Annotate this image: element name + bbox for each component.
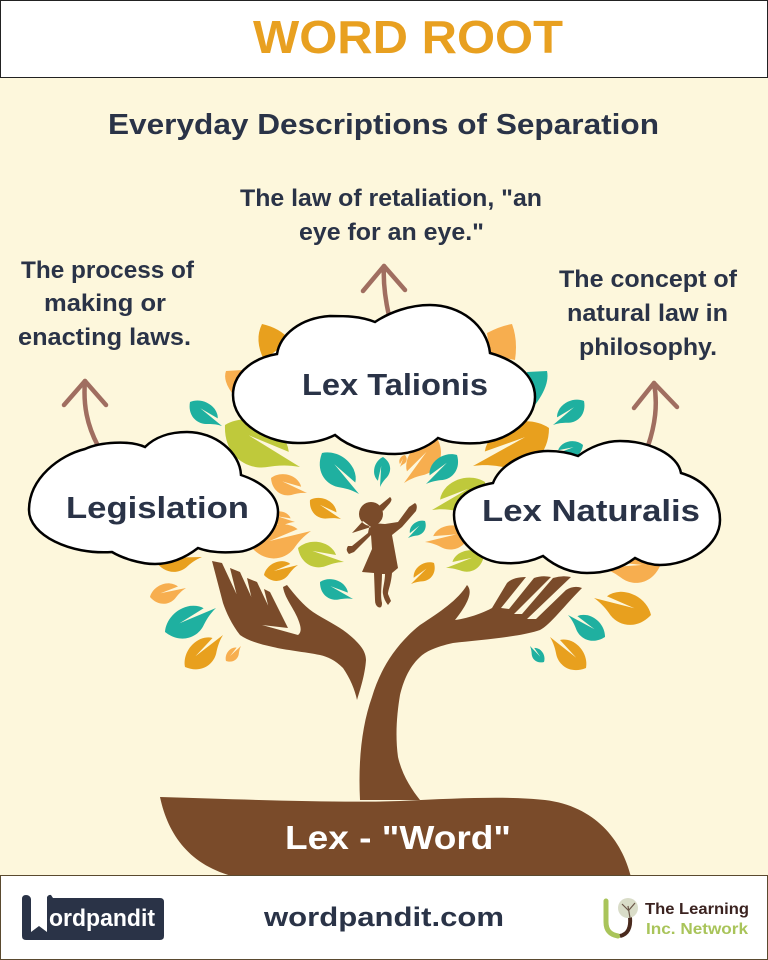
label: Lex Talionis [302,367,488,402]
heading: Everyday Descriptions of Separation [108,109,659,141]
text block: legislation definition: enacting laws. [18,324,191,351]
text block: lex naturalis definition: The concept of [559,266,738,293]
logo: wordpandit [22,895,164,940]
footer band [0,876,768,960]
icon: jumping child [347,497,417,608]
text block: legislation definition: The process of [21,257,195,284]
ground mound [160,797,631,877]
logo: the learning inc. network: The Learning [645,901,749,918]
arrow: lex talionis [363,266,405,316]
cloud: legislation [29,432,278,564]
arrow: lex naturalis [634,383,677,446]
left hand [212,561,366,700]
label: Lex Naturalis [482,493,700,528]
logo: wordpandit: ordpandit [49,905,155,932]
text block: lex talionis definition: eye for an eye." [299,219,484,246]
label: Legislation [66,490,249,525]
text block: lex naturalis definition [559,266,738,361]
text block: lex talionis definition [240,185,542,246]
right hand and trunk [360,576,582,800]
root word label: Lex - "Word" [285,819,511,856]
arrow: legislation [64,381,106,446]
text block: legislation definition: making or [44,290,166,317]
cloud: lex talionis [233,305,535,454]
website url: wordpandit.com [263,902,504,932]
title: WORD ROOT [253,11,563,63]
text block: lex talionis definition: The law of retaliation, "an [240,185,542,212]
text block: lex naturalis definition: natural law in [567,300,728,327]
tree [160,561,631,877]
header band [0,0,768,78]
leaves [148,324,661,678]
text block: legislation definition [18,257,195,351]
logo: the learning inc. network: Inc. Network [646,921,748,938]
logo: the learning inc. network [606,898,749,938]
cloud: lex naturalis [454,441,720,573]
text block: lex naturalis definition: philosophy. [579,334,717,361]
